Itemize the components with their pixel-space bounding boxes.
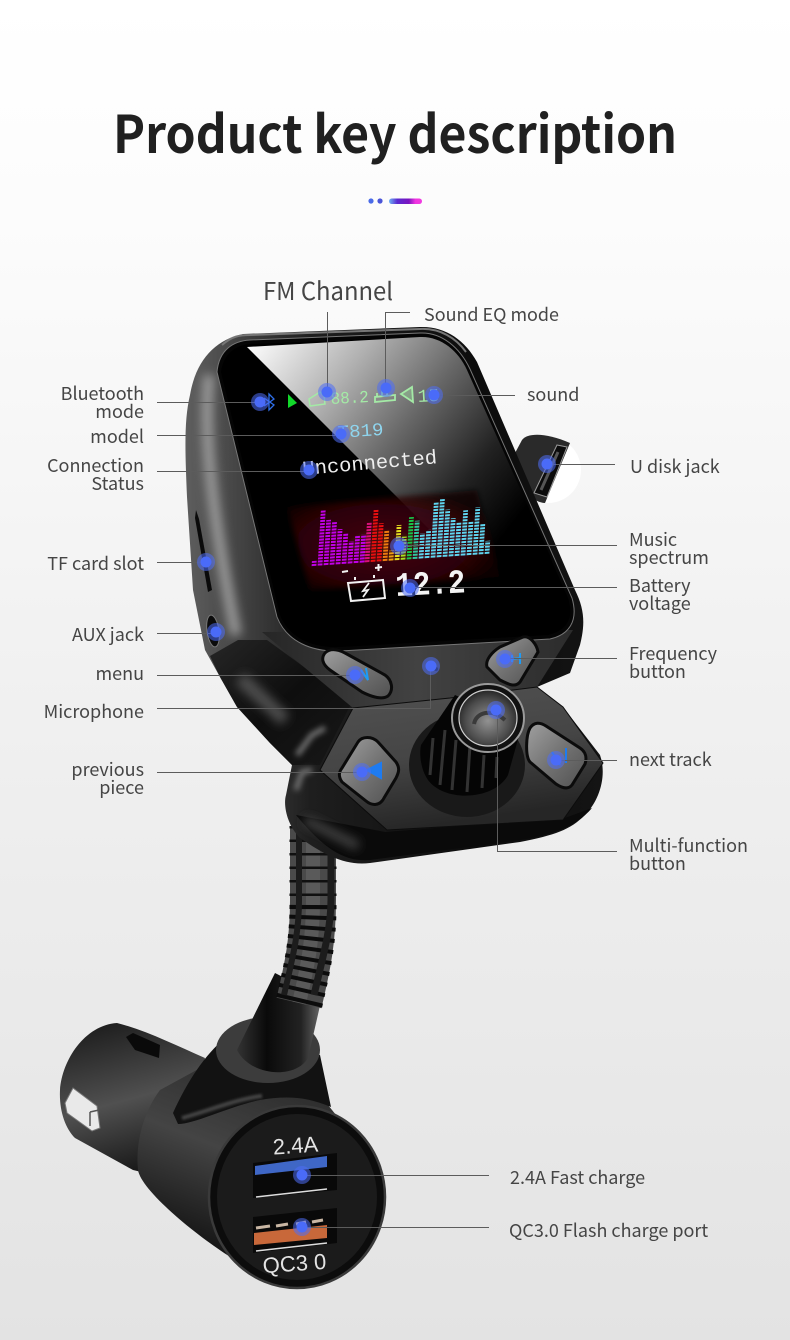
dot: EQ: [377, 379, 395, 397]
label: TF card slot: TF card slot: [47, 550, 144, 576]
main charger body: [137, 1060, 340, 1258]
dot: 2.4A: [293, 1166, 311, 1184]
collar disc: [216, 1017, 320, 1083]
label: Bluetooth mode: Bluetooth: [61, 380, 144, 406]
label: Connection Status: Connection: [47, 452, 144, 478]
menu button: [323, 650, 392, 698]
prev and next arrows: [367, 748, 566, 778]
AUX jack: [205, 614, 221, 648]
model text: T819: [337, 421, 384, 444]
label: sound: sound: [527, 381, 579, 407]
title accent: dots and gradient bar: [368, 198, 422, 204]
knuckle highlights: [296, 728, 325, 790]
label: QC3.0 Flash charge port: QC3.0 Flash charge port: [509, 1217, 708, 1243]
microphone hole: [434, 667, 438, 671]
jack housing: [507, 435, 570, 503]
label: next track: next track: [629, 746, 712, 772]
label: menu: menu: [95, 660, 144, 686]
upper control plate: [262, 630, 573, 708]
knob top ring: [452, 684, 524, 752]
status row: bluetooth icon: [264, 394, 274, 410]
dot: battery: [401, 579, 419, 597]
charger front face: [209, 1106, 385, 1288]
label: Music spectrum: spectrum: [629, 544, 709, 570]
dot: next: [547, 751, 565, 769]
title: Product key description: [113, 93, 677, 168]
dot: multi-function: [487, 701, 505, 719]
FM icon: [309, 392, 325, 406]
metal side highlight: [207, 375, 236, 635]
dot: music: [390, 537, 408, 555]
knob ribs: [430, 730, 497, 792]
contact notch: [90, 1110, 99, 1126]
cable centre shade: [299, 826, 313, 1003]
red spectrum glow: [287, 490, 500, 590]
TF card slot: [195, 510, 212, 592]
label: Connection Status: Status: [91, 470, 144, 496]
cone highlight: [182, 1096, 262, 1118]
lower left black section: [210, 640, 352, 765]
menu and frequency glyphs: [361, 653, 520, 680]
dot: TF card: [197, 553, 215, 571]
label: previous piece: previous: [71, 756, 144, 782]
frequency button: [487, 637, 538, 685]
dot: QC3.0: [293, 1218, 311, 1236]
screen bezel: [217, 333, 574, 651]
cable base taper: [237, 973, 322, 1072]
speaker icon: [401, 387, 413, 402]
highlight behind jack: [515, 437, 581, 503]
music spectrum bars: [314, 496, 490, 566]
EQ icon: [375, 389, 395, 402]
status row: green triangle: [288, 394, 297, 408]
volume value: 15: [417, 387, 440, 408]
FM frequency: 88.2: [330, 389, 369, 410]
knob base shadow: [409, 713, 525, 817]
cable right shade: [314, 826, 331, 995]
U disk jack: [507, 435, 581, 503]
car charger plug: [60, 1023, 340, 1258]
cable ribs bottom: [299, 905, 313, 1003]
label: Battery voltage: voltage: [629, 590, 691, 616]
label: Bluetooth mode: mode: [95, 398, 144, 424]
label: Frequency button: button: [629, 658, 686, 684]
screen black: [221, 337, 570, 647]
screen: [221, 337, 570, 647]
label: 2.4A Fast charge: 2.4A Fast charge: [510, 1164, 645, 1190]
ribbed cable: [299, 826, 313, 1003]
cone and shoulders: [173, 1038, 331, 1124]
dot: menu: [346, 666, 364, 684]
plug barrel: [60, 1023, 205, 1180]
face inner: [217, 1114, 377, 1280]
gooseneck: [173, 826, 331, 1124]
next track button: [527, 723, 586, 788]
dot: U disk: [538, 455, 556, 473]
dot: microphone: [422, 657, 440, 675]
multi-function knob: [409, 684, 525, 817]
label QC3 0: QC3 0: [262, 1249, 327, 1278]
knob ribbed body: [420, 695, 522, 796]
label: Multi-function button: Multi-function: [629, 832, 748, 858]
label: model: model: [90, 423, 144, 449]
lower left sheen: [240, 678, 285, 720]
bottom USB port: [253, 1208, 337, 1253]
plug top slot: [126, 1033, 160, 1058]
pins: [256, 1220, 323, 1228]
dot: connection: [300, 461, 318, 479]
voltage value: 12.2: [395, 565, 466, 607]
silver side contact: [65, 1088, 100, 1131]
dot: FM: [318, 383, 336, 401]
top edge highlight: [222, 329, 466, 352]
connection status text: Unconnected: [302, 447, 438, 482]
blue tongue: [255, 1156, 327, 1175]
top USB port: [253, 1153, 337, 1198]
dot: bluetooth: [251, 393, 269, 411]
label: Battery voltage: Battery: [629, 572, 691, 598]
label 2.4A: 2.4A: [272, 1131, 319, 1160]
label: FM Channel: FM Channel: [263, 273, 393, 308]
jack slot: [534, 445, 567, 497]
callout dots: [197, 379, 565, 1236]
cable ribs top: [290, 826, 336, 905]
glass glare: [247, 337, 552, 600]
outer shell: [185, 327, 603, 863]
face rim: [209, 1106, 385, 1288]
dot: frequency: [496, 650, 514, 668]
dot: AUX: [207, 623, 225, 641]
previous track button: [339, 738, 399, 804]
control buttons: [323, 637, 586, 804]
label: previous piece: piece: [99, 774, 144, 800]
phone glyph: [474, 713, 505, 724]
label: Multi-function button: button: [629, 850, 686, 876]
orange tongue: [254, 1225, 327, 1245]
knob cap: [459, 690, 517, 746]
lower control plate: [320, 687, 603, 830]
dot: previous: [353, 763, 371, 781]
jack tongue: [541, 452, 558, 490]
label: Sound EQ mode: Sound EQ mode: [424, 301, 559, 327]
cable left shade: [284, 826, 299, 995]
label: Music spectrum: Music: [629, 526, 677, 552]
label: AUX jack: AUX jack: [72, 621, 144, 647]
dot: sound: [425, 386, 443, 404]
label: Microphone: Microphone: [44, 698, 144, 724]
label: U disk jack: U disk jack: [630, 453, 720, 479]
leader lines: [157, 312, 617, 1228]
bottom left sheen: [305, 820, 358, 846]
battery icon: [342, 564, 385, 601]
device body: [185, 327, 603, 863]
label: Frequency button: Frequency: [629, 640, 718, 666]
dot: model: [332, 425, 350, 443]
bottom black band: [296, 808, 592, 860]
